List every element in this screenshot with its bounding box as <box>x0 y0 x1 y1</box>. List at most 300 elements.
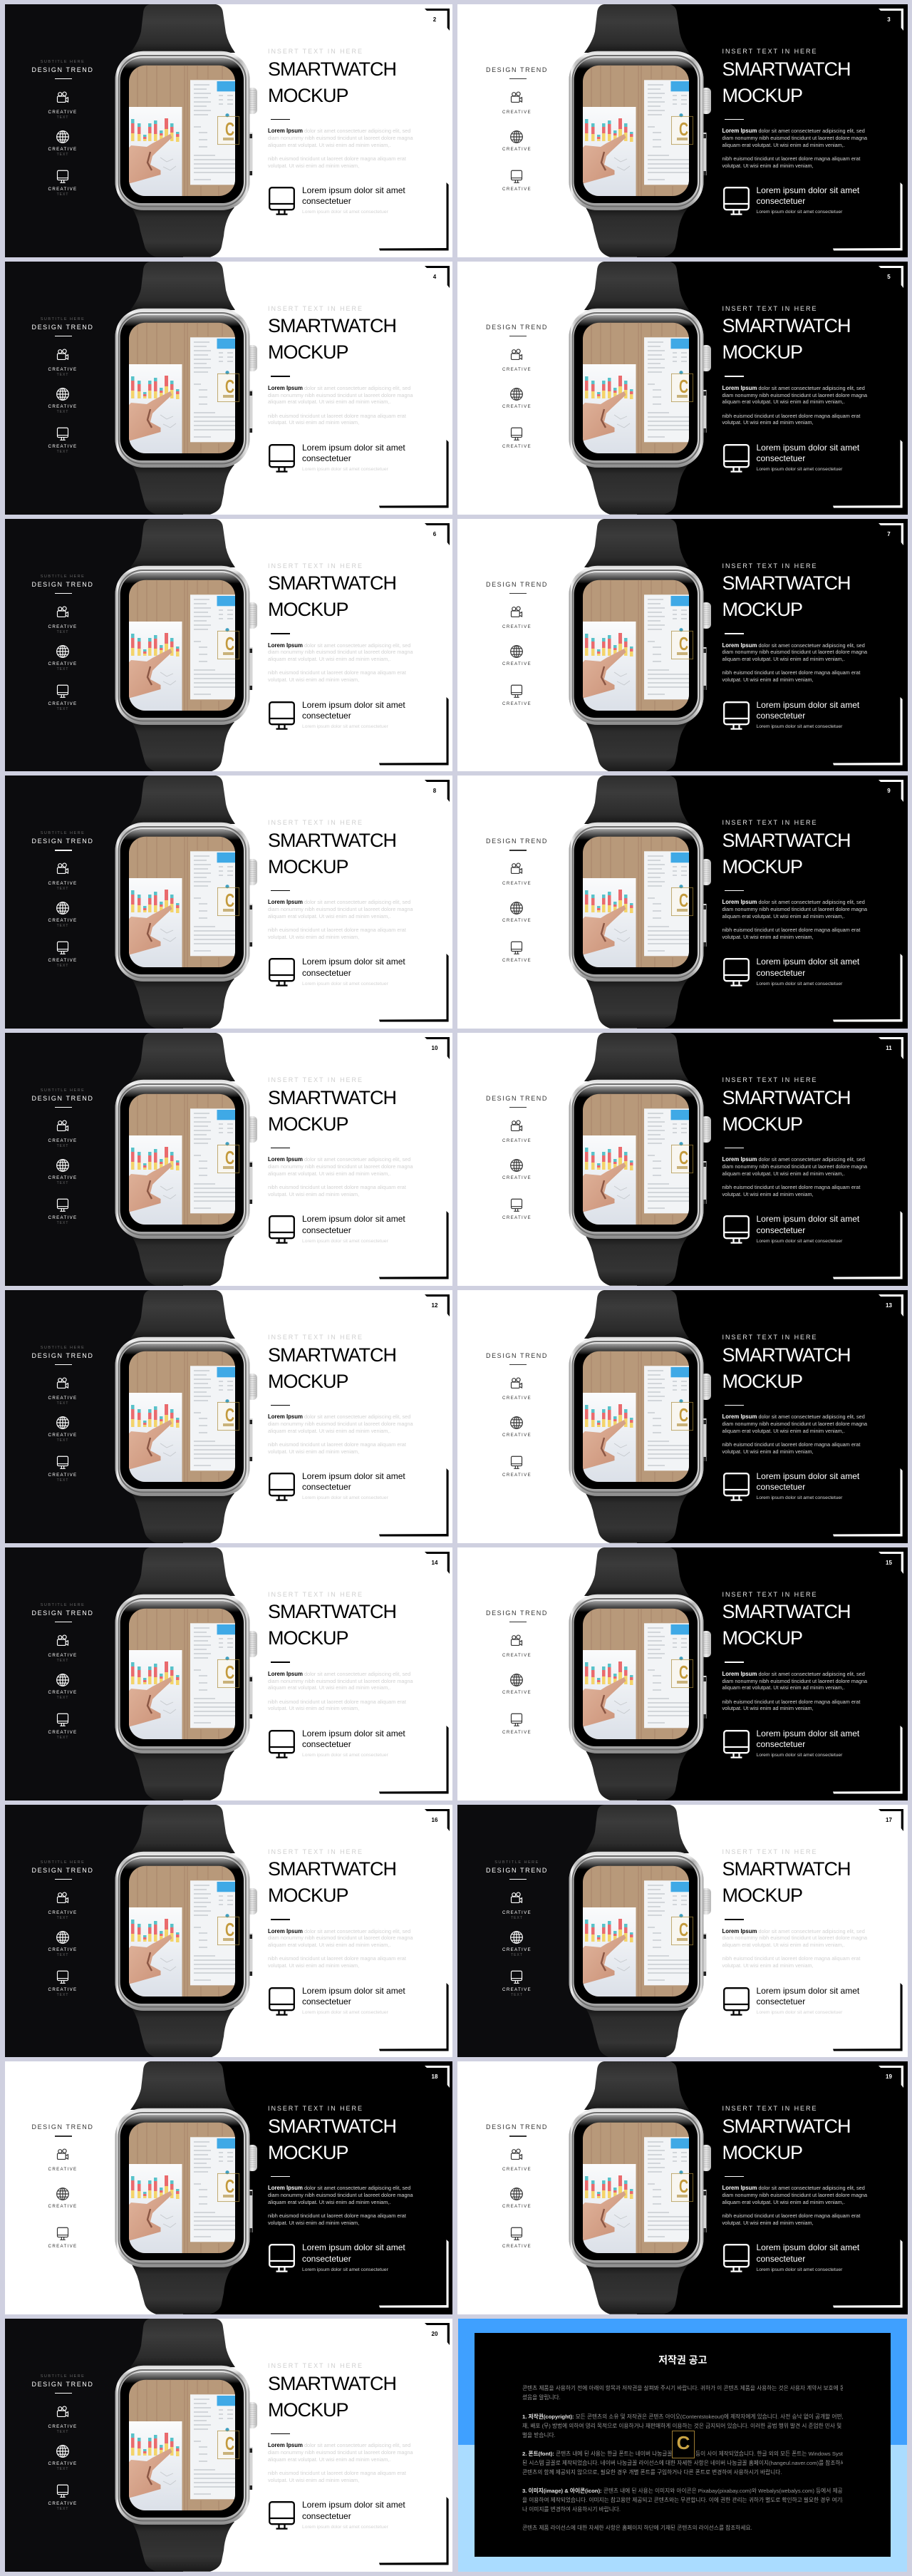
notice text: 나 이미지를 변경하여 사용하시기 바랍니다. <box>522 2506 621 2513</box>
sidebar item: video: CREATIVE <box>502 1138 532 1143</box>
heading: INSERT TEXT IN HERE <box>722 1334 817 1341</box>
feature text: consectetuer <box>302 453 351 463</box>
sidebar item: monitor: CREATIVE <box>502 2244 532 2249</box>
body text: Lorem Ipsum dolor sit amet consectetuer adipiscing elit, sed <box>268 642 410 649</box>
sidebar: SUBTITLE HERE <box>494 575 539 579</box>
body text: nibh euismod tincidunt ut laoreet dolore magna aliquam erat <box>722 669 860 676</box>
heading: SMARTWATCH <box>722 1344 851 1366</box>
sidebar: DESIGN TREND <box>31 2123 94 2131</box>
smartwatch mockup: C <box>679 118 688 140</box>
sidebar <box>4 2319 121 2533</box>
sidebar item: monitor <box>459 1713 575 1747</box>
body text: volutpat. Ut wisi enim ad minim veniam, <box>722 419 814 426</box>
feature text: Lorem ipsum dolor sit amet <box>757 1471 859 1481</box>
smartwatch mockup: C <box>224 1919 234 1940</box>
sidebar item: video: TEXT <box>57 115 68 120</box>
sidebar item: video <box>48 349 77 377</box>
body text: aliquam erat volutpat. Ut wisi enim ad minim veniam,. <box>722 1942 845 1948</box>
sidebar item: monitor: CREATIVE <box>502 1473 532 1478</box>
body text: aliquam erat volutpat. Ut wisi enim ad minim veniam,. <box>722 142 845 148</box>
body text: nibh euismod tincidunt ut laoreet dolore magna aliquam erat <box>722 1441 860 1448</box>
feature text <box>757 1471 878 1504</box>
sidebar item: monitor: TEXT <box>57 2507 68 2511</box>
sidebar: DESIGN TREND <box>486 1352 548 1359</box>
sidebar item: video: TEXT <box>57 630 68 634</box>
sidebar <box>486 60 548 197</box>
sidebar item: monitor <box>4 2227 121 2261</box>
sidebar item: globe: TEXT <box>57 1181 68 1185</box>
slide number: 8 <box>433 788 436 794</box>
sidebar item: globe <box>4 2187 121 2221</box>
feature text: consectetuer <box>302 968 351 978</box>
feature text <box>302 957 423 989</box>
sidebar item: video: TEXT <box>511 2173 523 2177</box>
body text: Lorem Ipsum dolor sit amet consectetuer adipiscing elit, sed <box>268 128 410 134</box>
sidebar item: video <box>4 2148 121 2183</box>
feature text: consectetuer <box>302 1739 351 1749</box>
corner frame <box>829 1805 906 2057</box>
sidebar item: video: TEXT <box>511 1144 523 1148</box>
sidebar item: monitor <box>459 684 575 718</box>
panel: slide 4 <box>4 262 452 515</box>
slide number: 16 <box>432 1817 437 1823</box>
body text: Lorem Ipsum dolor sit amet consectetuer adipiscing elit, sed <box>722 899 865 905</box>
body text: nibh euismod tincidunt ut laoreet dolore magna aliquam erat <box>268 2470 406 2476</box>
corner frame <box>375 1805 452 2057</box>
panel: slide 6 <box>4 519 452 771</box>
sidebar item: video: CREATIVE <box>48 1138 77 1143</box>
heading: MOCKUP <box>268 1113 348 1135</box>
feature text: consectetuer <box>757 1482 805 1492</box>
feature text <box>302 2500 423 2533</box>
heading: SMARTWATCH <box>268 1087 396 1108</box>
smartwatch mockup: C <box>679 633 688 654</box>
sidebar item: globe <box>502 130 532 157</box>
body text <box>722 2185 875 2227</box>
body text: diam nonummy nibh euismod tincidunt ut laoreet dolore magna <box>722 1934 867 1941</box>
sidebar item: monitor: TEXT <box>57 707 68 711</box>
body text: diam nonummy nibh euismod tincidunt ut laoreet dolore magna <box>722 392 867 398</box>
body text <box>722 1928 875 1971</box>
panel: slide 15 <box>459 1547 908 1800</box>
icon: monitor <box>269 1473 295 1501</box>
body text: diam nonummy nibh euismod tincidunt ut laoreet dolore magna <box>268 135 413 141</box>
sidebar item: monitor: CREATIVE <box>502 958 532 963</box>
sidebar item: globe: TEXT <box>511 1953 523 1957</box>
feature text: consectetuer <box>757 453 805 463</box>
icon: monitor <box>269 444 295 473</box>
smartwatch mockup <box>4 519 261 771</box>
smartwatch mockup: C <box>224 1661 234 1683</box>
heading <box>268 562 439 635</box>
sidebar item: monitor: TEXT <box>57 1993 68 1997</box>
corner frame <box>375 2061 452 2314</box>
slide number: 12 <box>432 1302 437 1309</box>
heading: INSERT TEXT IN HERE <box>722 1076 817 1083</box>
sidebar: SUBTITLE HERE <box>41 1346 85 1350</box>
panel: slide 10 <box>4 1033 452 1286</box>
sidebar item: monitor: TEXT <box>57 1478 68 1483</box>
feature text: Lorem ipsum dolor sit amet <box>757 1986 859 1996</box>
sidebar item: globe: TEXT <box>57 153 68 157</box>
icon: monitor <box>269 1730 295 1758</box>
feature text: consectetuer <box>302 711 351 721</box>
smartwatch mockup <box>4 2319 261 2572</box>
feature text: Lorem ipsum dolor sit amet <box>302 443 405 453</box>
sidebar item: monitor: TEXT <box>57 450 68 454</box>
sidebar item: globe: CREATIVE <box>48 918 77 923</box>
sidebar: SUBTITLE HERE <box>494 1346 539 1350</box>
body text: diam nonummy nibh euismod tincidunt ut laoreet dolore magna <box>722 2192 867 2198</box>
feature text: Lorem ipsum dolor sit amet consectetuer <box>302 210 388 215</box>
body text: diam nonummy nibh euismod tincidunt ut laoreet dolore magna <box>722 906 867 912</box>
body text: volutpat. Ut wisi enim ad minim veniam, <box>722 934 814 940</box>
smartwatch mockup: C <box>679 376 688 397</box>
sidebar item: globe: CREATIVE <box>48 2461 77 2466</box>
sidebar item: video: TEXT <box>511 373 523 377</box>
body text: Lorem Ipsum dolor sit amet consectetuer adipiscing elit, sed <box>722 1156 865 1163</box>
sidebar item: monitor <box>4 2484 121 2518</box>
feature text: Lorem ipsum dolor sit amet <box>757 2242 859 2252</box>
feature text: consectetuer <box>757 1225 805 1235</box>
sidebar: SUBTITLE HERE <box>41 317 85 321</box>
body text: volutpat. Ut wisi enim ad minim veniam, <box>268 2477 359 2483</box>
sidebar item: globe <box>4 1930 121 1964</box>
body text: Lorem Ipsum dolor sit amet consectetuer adipiscing elit, sed <box>268 385 410 391</box>
sidebar item: video: TEXT <box>57 1401 68 1406</box>
body text: aliquam erat volutpat. Ut wisi enim ad minim veniam,. <box>268 1428 390 1434</box>
panel: slide 11 <box>459 1033 908 1286</box>
body text <box>268 642 421 685</box>
sidebar item: monitor <box>459 2227 575 2261</box>
sidebar item: video: TEXT <box>511 630 523 634</box>
heading: INSERT TEXT IN HERE <box>268 2362 363 2369</box>
body text: aliquam erat volutpat. Ut wisi enim ad minim veniam,. <box>268 2456 390 2463</box>
sidebar item: globe: TEXT <box>511 2210 523 2214</box>
sidebar <box>459 2061 575 2275</box>
sidebar: DESIGN TREND <box>486 1609 548 1617</box>
corner frame <box>375 776 452 1029</box>
feature text: Lorem ipsum dolor sit amet consectetuer <box>302 2010 388 2015</box>
corner frame <box>375 1290 452 1543</box>
feature text <box>757 185 859 215</box>
sidebar: DESIGN TREND <box>31 1867 94 1874</box>
sidebar item: video: CREATIVE <box>48 367 77 372</box>
sidebar item: video: TEXT <box>511 887 523 891</box>
sidebar item: monitor: CREATIVE <box>48 1215 77 1220</box>
icon: monitor <box>722 701 750 730</box>
sidebar item: video: TEXT <box>57 373 68 377</box>
heading: SMARTWATCH <box>722 572 851 594</box>
heading <box>268 2362 439 2435</box>
sidebar item: monitor <box>502 428 532 454</box>
sidebar item: monitor <box>459 941 575 975</box>
heading <box>722 1591 893 1664</box>
heading <box>268 305 396 377</box>
body text: Lorem Ipsum dolor sit amet consectetuer adipiscing elit, sed <box>722 128 865 134</box>
sidebar item: video: CREATIVE <box>48 1653 77 1658</box>
smartwatch mockup: C <box>224 633 234 654</box>
heading: SMARTWATCH <box>722 2116 851 2137</box>
heading: SMARTWATCH <box>268 2116 396 2137</box>
body text: nibh euismod tincidunt ut laoreet dolore magna aliquam erat <box>722 1184 860 1190</box>
sidebar item: video: TEXT <box>57 1916 68 1920</box>
heading <box>722 1848 893 1921</box>
notice card <box>475 2333 891 2557</box>
heading: INSERT TEXT IN HERE <box>722 1591 817 1598</box>
notice text: 콘텐츠의 함께 제공되지 않으므로, 필요한 경우 개별 폰트를 구입하거나 다른 폰트로 변경하여 사용하시기 바랍니다. <box>522 2469 782 2475</box>
icon: monitor <box>269 1215 295 1244</box>
heading: INSERT TEXT IN HERE <box>268 1591 363 1598</box>
body text: aliquam erat volutpat. Ut wisi enim ad minim veniam,. <box>722 1170 845 1177</box>
sidebar item: globe: TEXT <box>57 1438 68 1443</box>
sidebar item: monitor <box>4 941 121 975</box>
feature text: Lorem ipsum dolor sit amet consectetuer <box>757 1753 842 1758</box>
body text <box>268 899 421 942</box>
sidebar item: video: CREATIVE <box>502 1396 532 1401</box>
sidebar <box>459 1547 575 1761</box>
sidebar <box>4 519 121 733</box>
heading <box>268 48 396 120</box>
sidebar item: monitor <box>459 1970 575 2004</box>
sidebar item: globe: CREATIVE <box>502 2204 532 2209</box>
sidebar: DESIGN TREND <box>486 66 548 73</box>
sidebar item: video: CREATIVE <box>502 110 532 115</box>
sidebar item: video: CREATIVE <box>48 1396 77 1401</box>
sidebar item: globe: TEXT <box>511 1696 523 1700</box>
feature text: Lorem ipsum dolor sit amet consectetuer <box>757 1239 842 1243</box>
heading: MOCKUP <box>268 1370 348 1391</box>
sidebar item: monitor: TEXT <box>511 707 523 711</box>
body text: volutpat. Ut wisi enim ad minim veniam, <box>722 2220 814 2226</box>
sidebar: DESIGN TREND <box>31 324 94 331</box>
heading: MOCKUP <box>268 84 348 105</box>
feature text: Lorem ipsum dolor sit amet consectetuer <box>302 467 388 472</box>
sidebar item: monitor <box>459 1456 575 1490</box>
sidebar <box>31 60 94 197</box>
sidebar item: globe <box>459 1930 575 1964</box>
feature text: Lorem ipsum dolor sit amet <box>757 957 859 967</box>
icon: monitor <box>722 1987 750 2016</box>
feature text: Lorem ipsum dolor sit amet consectetuer <box>757 2010 842 2015</box>
icon: monitor <box>722 2244 750 2272</box>
feature text: Lorem ipsum dolor sit amet <box>302 2500 405 2510</box>
heading <box>268 2105 439 2178</box>
sidebar item: video <box>48 91 77 120</box>
heading: SMARTWATCH <box>268 572 396 594</box>
body text: nibh euismod tincidunt ut laoreet dolore magna aliquam erat <box>268 413 406 419</box>
feature text: Lorem ipsum dolor sit amet <box>757 700 859 710</box>
feature text <box>302 700 423 733</box>
smartwatch mockup <box>459 776 715 1029</box>
icon: monitor <box>723 444 750 473</box>
sidebar item: monitor: CREATIVE <box>48 2244 77 2249</box>
sidebar item: monitor: CREATIVE <box>502 1987 532 1992</box>
sidebar item: monitor: TEXT <box>511 964 523 968</box>
heading: MOCKUP <box>268 856 348 877</box>
feature text: Lorem ipsum dolor sit amet <box>302 2242 405 2252</box>
corner frame <box>833 266 903 508</box>
slide number: 7 <box>887 531 891 537</box>
body text <box>268 1413 421 1456</box>
smartwatch mockup: C <box>224 2433 234 2454</box>
corner frame <box>833 9 903 251</box>
feature text <box>302 2242 423 2275</box>
sidebar: SUBTITLE HERE <box>494 831 539 835</box>
sidebar item: monitor: CREATIVE <box>48 958 77 963</box>
feature text <box>757 700 878 733</box>
heading: MOCKUP <box>268 341 348 363</box>
sidebar item: globe: CREATIVE <box>502 1175 532 1180</box>
icon: monitor <box>722 1473 750 1501</box>
sidebar <box>31 317 94 454</box>
slide number: 11 <box>886 1045 892 1051</box>
notice text: 콘텐츠 제품 라이선스에 대한 자세한 사항은 홈페이지 하단에 기재된 콘텐츠의 라이선스를 참조하세요. <box>522 2525 752 2531</box>
watermark: gold C <box>672 2431 695 2458</box>
sidebar item: globe <box>4 2444 121 2478</box>
body text: diam nonummy nibh euismod tincidunt ut laoreet dolore magna <box>268 1678 413 1684</box>
body text: nibh euismod tincidunt ut laoreet dolore magna aliquam erat <box>268 155 406 162</box>
notice text: 셨음을 알립니다. <box>522 2394 561 2401</box>
heading <box>268 1591 439 1664</box>
body text: diam nonummy nibh euismod tincidunt ut laoreet dolore magna <box>722 1678 867 1684</box>
panel: slide 19 <box>459 2061 908 2314</box>
slide number: 13 <box>886 1302 892 1309</box>
sidebar item: globe: CREATIVE <box>48 2204 77 2209</box>
notice text: 벌을 받습니다. <box>522 2432 556 2438</box>
body text: Lorem Ipsum dolor sit amet consectetuer adipiscing elit, sed <box>722 1671 865 1677</box>
sidebar <box>4 2061 121 2275</box>
body text: nibh euismod tincidunt ut laoreet dolore magna aliquam erat <box>722 2212 860 2219</box>
heading <box>268 1848 439 1921</box>
feature text <box>302 185 405 215</box>
heading: MOCKUP <box>722 856 802 877</box>
sidebar item: monitor: TEXT <box>57 1736 68 1740</box>
smartwatch mockup <box>459 1033 715 1286</box>
feature text: Lorem ipsum dolor sit amet consectetuer <box>757 982 842 986</box>
sidebar item: globe: CREATIVE <box>48 1947 77 1952</box>
feature text: Lorem ipsum dolor sit amet consectetuer <box>757 724 842 729</box>
feature text: Lorem ipsum dolor sit amet consectetuer <box>302 1239 388 1243</box>
smartwatch mockup: C <box>679 1147 688 1168</box>
sidebar item: monitor: TEXT <box>511 192 523 197</box>
sidebar item: globe <box>459 901 575 935</box>
heading: SMARTWATCH <box>722 58 851 80</box>
sidebar item: monitor: CREATIVE <box>502 1730 532 1735</box>
sidebar item: globe <box>4 901 121 935</box>
slide number: 6 <box>433 531 436 537</box>
sidebar item: globe <box>48 388 77 414</box>
body text: aliquam erat volutpat. Ut wisi enim ad minim veniam,. <box>268 2199 390 2205</box>
smartwatch mockup <box>4 1805 261 2057</box>
sidebar: SUBTITLE HERE <box>41 831 85 835</box>
sidebar item: video: TEXT <box>57 1659 68 1663</box>
heading: INSERT TEXT IN HERE <box>722 819 817 826</box>
slide number: 5 <box>887 274 891 280</box>
sidebar item: video <box>459 606 575 640</box>
heading: SMARTWATCH <box>722 315 851 336</box>
body text: diam nonummy nibh euismod tincidunt ut laoreet dolore magna <box>268 392 413 398</box>
sidebar item: globe: TEXT <box>57 667 68 671</box>
sidebar: DESIGN TREND <box>486 838 548 845</box>
smartwatch mockup <box>4 776 261 1029</box>
sidebar: DESIGN TREND <box>31 1095 94 1102</box>
sidebar item: video <box>502 91 532 120</box>
heading: MOCKUP <box>268 1627 348 1649</box>
feature text: Lorem ipsum dolor sit amet consectetuer <box>302 2525 388 2529</box>
sidebar <box>4 1805 121 2019</box>
sidebar item: monitor: TEXT <box>57 192 68 197</box>
heading: INSERT TEXT IN HERE <box>722 2105 817 2112</box>
sidebar item: globe: CREATIVE <box>48 1690 77 1695</box>
panel: slide 8 <box>4 776 452 1029</box>
sidebar: SUBTITLE HERE <box>41 1088 85 1093</box>
sidebar item: video: CREATIVE <box>502 881 532 886</box>
sidebar item: video: CREATIVE <box>502 624 532 629</box>
heading <box>722 819 893 892</box>
sidebar item: monitor <box>4 1713 121 1747</box>
sidebar item: monitor: CREATIVE <box>502 444 532 449</box>
body text: nibh euismod tincidunt ut laoreet dolore magna aliquam erat <box>722 413 860 419</box>
smartwatch mockup <box>4 1547 261 1800</box>
sidebar item: video: CREATIVE <box>502 2167 532 2172</box>
heading <box>722 562 893 635</box>
feature text: Lorem ipsum dolor sit amet consectetuer <box>302 1495 388 1500</box>
feature text: consectetuer <box>757 711 805 721</box>
body text: Lorem Ipsum dolor sit amet consectetuer adipiscing elit, sed <box>268 1671 410 1677</box>
smartwatch mockup: C <box>224 2175 234 2197</box>
smartwatch mockup <box>459 1547 715 1800</box>
feature text <box>757 1214 878 1247</box>
sidebar: DESIGN TREND <box>31 1609 94 1617</box>
sidebar item: monitor: CREATIVE <box>48 187 77 192</box>
body text: volutpat. Ut wisi enim ad minim veniam, <box>268 2220 359 2226</box>
corner frame <box>829 2061 906 2314</box>
feature text: Lorem ipsum dolor sit amet consectetuer <box>757 210 842 215</box>
feature text: Lorem ipsum dolor sit amet consectetuer <box>302 724 388 729</box>
sidebar item: video: TEXT <box>57 2173 68 2177</box>
slide number: 17 <box>886 1817 892 1823</box>
sidebar item: monitor: TEXT <box>511 2250 523 2254</box>
sidebar item: monitor: CREATIVE <box>48 1730 77 1735</box>
sidebar item: globe <box>502 388 532 414</box>
slide number: 18 <box>432 2073 437 2080</box>
body text <box>268 2185 421 2227</box>
body text: aliquam erat volutpat. Ut wisi enim ad minim veniam,. <box>722 913 845 919</box>
heading: SMARTWATCH <box>722 830 851 851</box>
sidebar item: monitor <box>48 428 77 454</box>
sidebar item: globe: CREATIVE <box>48 661 77 666</box>
sidebar: SUBTITLE HERE <box>41 2374 85 2379</box>
body text: volutpat. Ut wisi enim ad minim veniam, <box>722 1962 814 1969</box>
body text: aliquam erat volutpat. Ut wisi enim ad minim veniam,. <box>722 1684 845 1691</box>
sidebar <box>459 1805 575 2019</box>
panel: slide 7 <box>459 519 908 771</box>
feature text: consectetuer <box>302 196 351 206</box>
smartwatch mockup <box>4 1033 261 1286</box>
body text: Lorem Ipsum dolor sit amet consectetuer adipiscing elit, sed <box>268 1413 410 1420</box>
body text: aliquam erat volutpat. Ut wisi enim ad minim veniam,. <box>268 142 390 148</box>
sidebar item: monitor <box>4 1970 121 2004</box>
heading: MOCKUP <box>722 1370 802 1391</box>
sidebar item: globe <box>459 2187 575 2221</box>
corner frame <box>829 1547 906 1800</box>
sidebar item: monitor: CREATIVE <box>48 1473 77 1478</box>
sidebar item: video: CREATIVE <box>502 1653 532 1658</box>
heading: INSERT TEXT IN HERE <box>268 48 363 55</box>
feature text: consectetuer <box>757 1739 805 1749</box>
sidebar item: monitor: CREATIVE <box>48 2501 77 2506</box>
